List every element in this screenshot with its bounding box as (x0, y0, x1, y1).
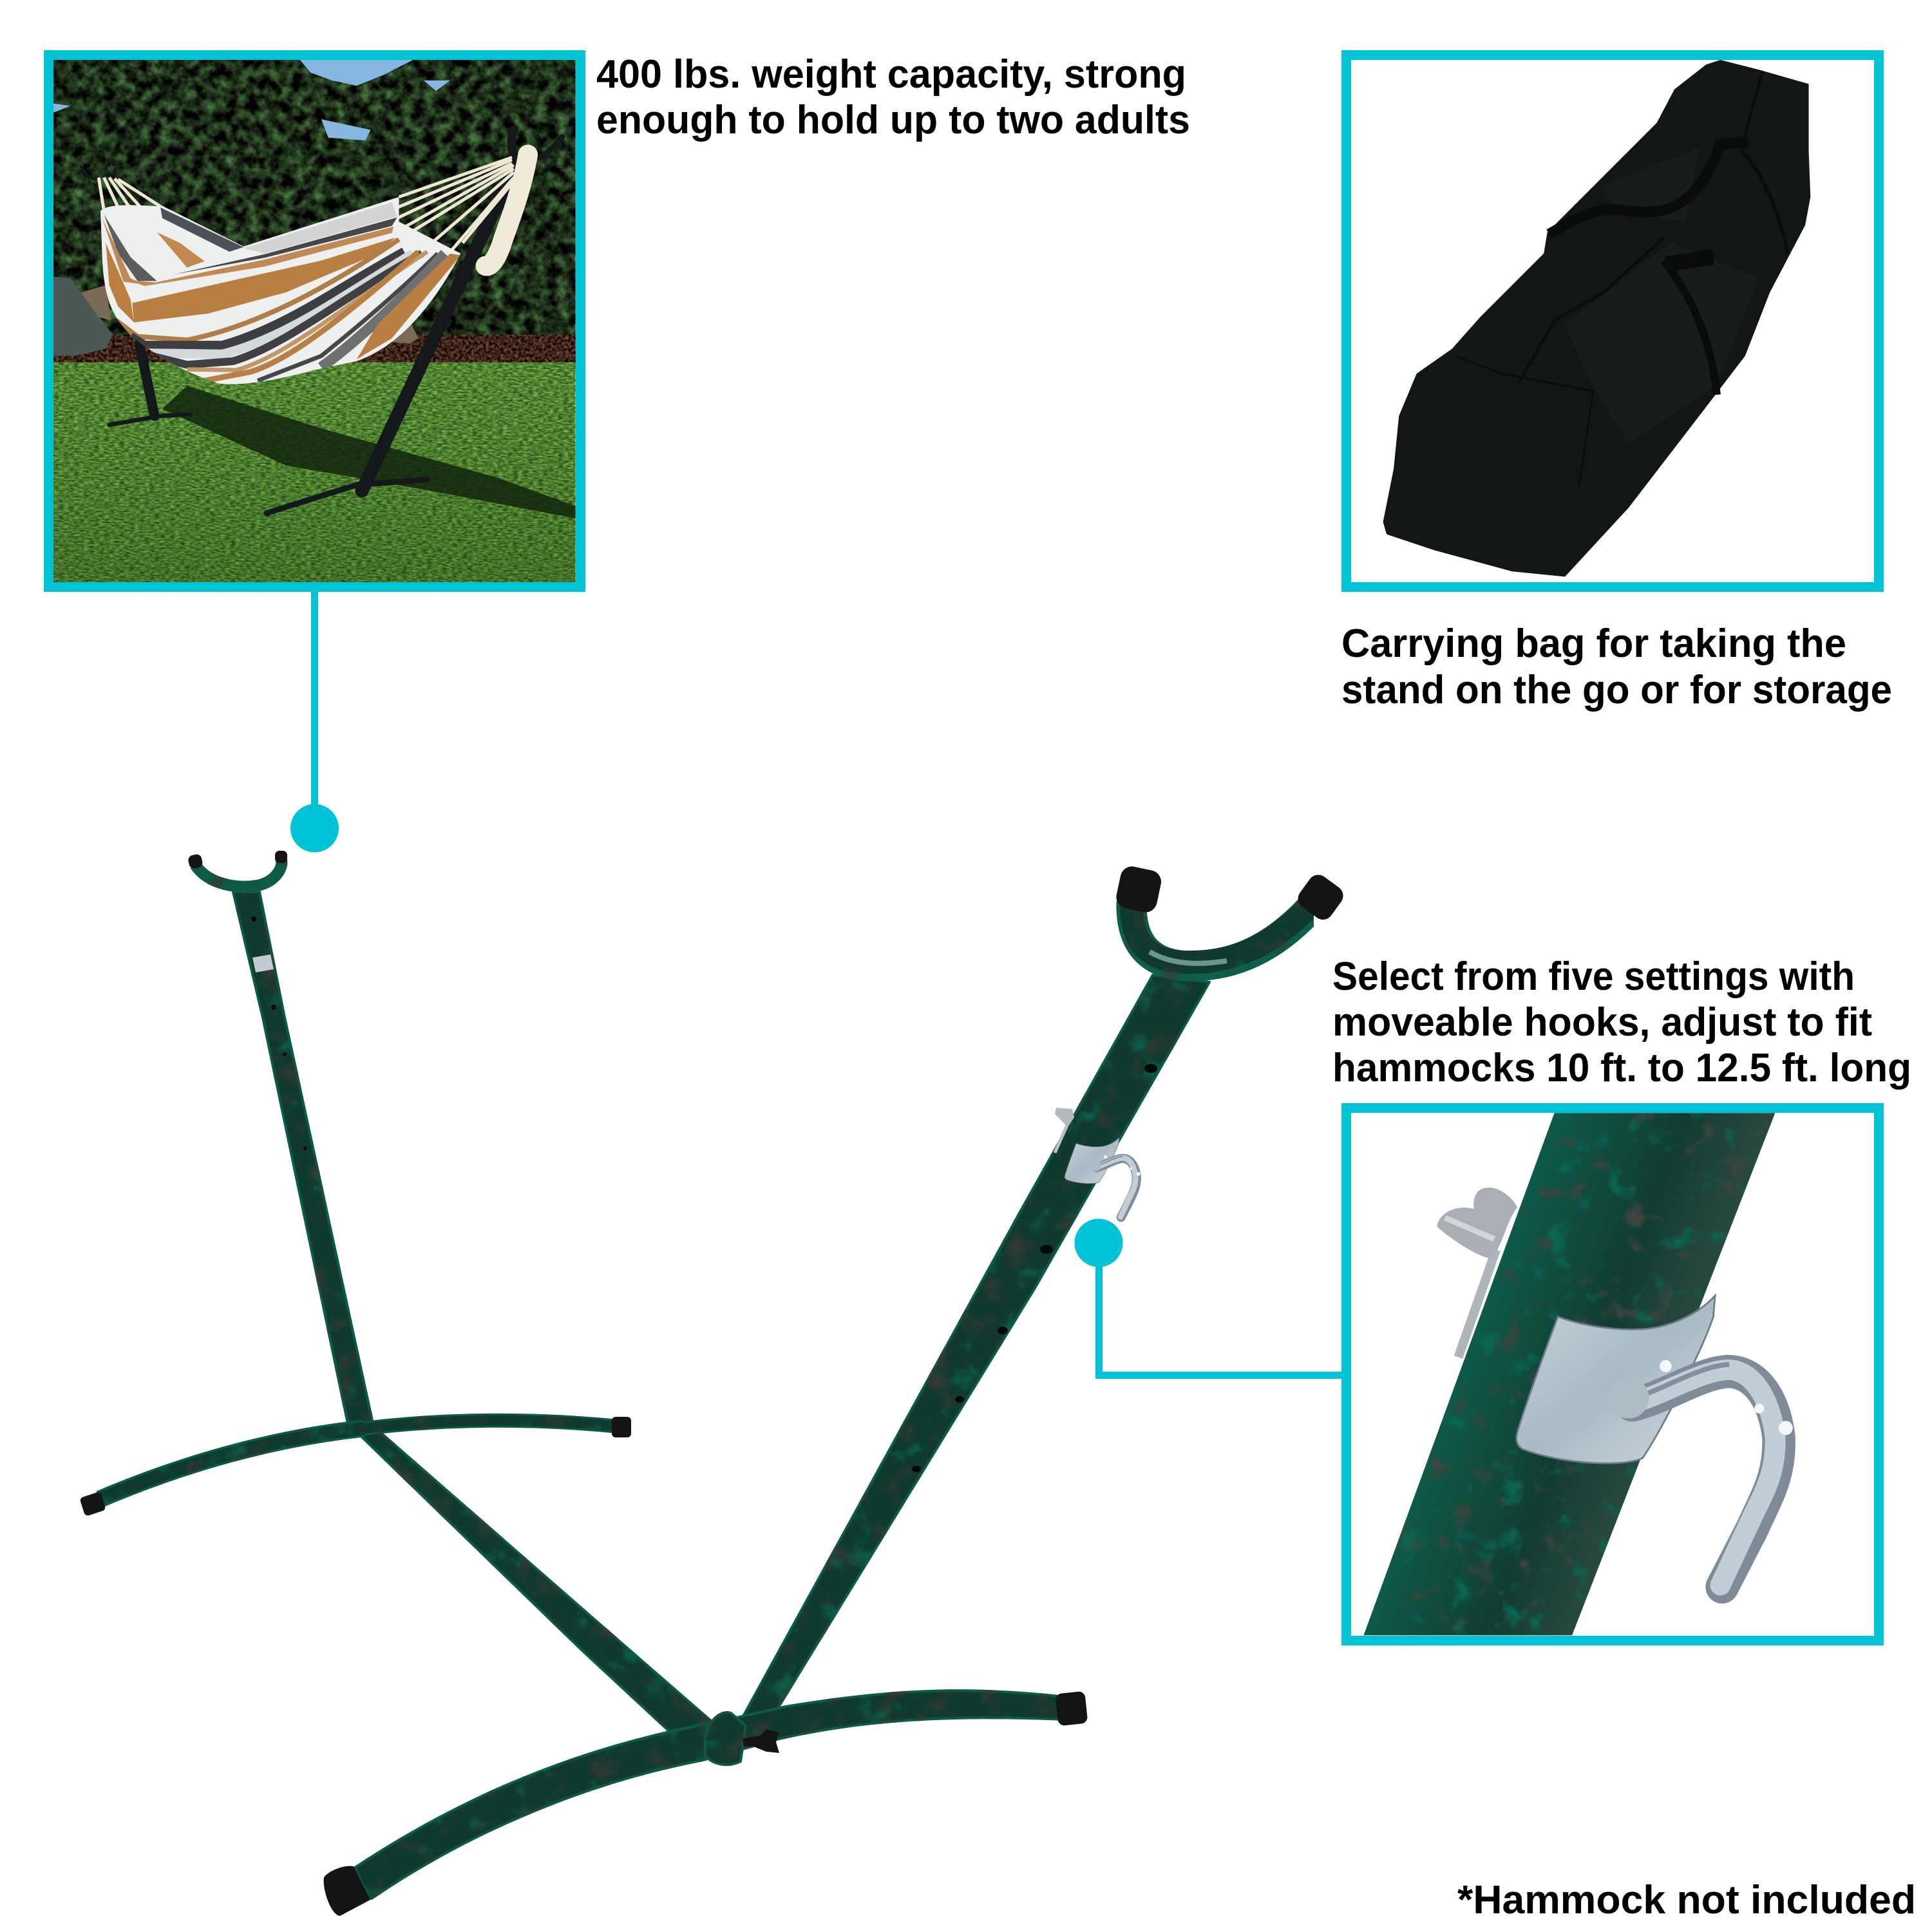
text: weight capacity: enough to hold up to two adults (596, 98, 1190, 142)
bag seams and straps (1455, 71, 1788, 487)
connector line: capacity photo to stand (290, 592, 339, 853)
connector line: hook close-up to stand (1074, 1218, 1346, 1376)
text: weight capacity: 400 lbs. weight capacity, strong (596, 52, 1186, 97)
sky (53, 60, 450, 140)
end caps (79, 851, 1347, 1916)
hook frame (1346, 1108, 1879, 1641)
stand tubes (97, 860, 1314, 1900)
stand in photo (81, 130, 562, 513)
clamp and hook (1517, 1296, 1793, 1587)
rope coil (486, 155, 528, 266)
text: hook settings: moveable hooks, adjust to fit (1332, 1000, 1872, 1045)
small clamp on left post (252, 954, 274, 972)
photo frame (49, 55, 581, 587)
shadow (162, 386, 576, 518)
wing nut and plate (1437, 1188, 1517, 1358)
text: carrying bag: stand on the go or for storage (1341, 668, 1892, 712)
text: carrying bag (1341, 621, 1892, 712)
hammock stand (79, 851, 1347, 1916)
photo panel: carrying bag (1346, 55, 1879, 587)
hammock fabric (91, 193, 466, 392)
adjustable hook on right post (1055, 1108, 1141, 1217)
adjustment holes (251, 916, 1157, 1472)
footnote: *Hammock not included (1457, 1878, 1916, 1922)
photo panel: hook close-up (1346, 1108, 1879, 1641)
mulch (53, 335, 576, 366)
text: hook settings: Select from five settings with (1332, 954, 1855, 999)
text: hook settings: hammocks 10 ft. to 12.5 ft. long (1332, 1046, 1911, 1090)
highlight on upper arm (1150, 952, 1227, 963)
green tube (1363, 1113, 1775, 1635)
bag body (1383, 60, 1810, 576)
rocks (53, 276, 113, 356)
photo panel: hammock on stand (49, 55, 581, 587)
text: carrying bag: Carrying bag for taking the (1341, 621, 1846, 666)
grass (53, 363, 576, 585)
text: weight capacity (596, 52, 1190, 142)
bag panels (1565, 147, 1759, 444)
ropes (99, 157, 514, 250)
trees (53, 60, 576, 364)
bag frame (1346, 55, 1879, 587)
fanned stripes (117, 240, 445, 381)
text: hook settings (1332, 954, 1911, 1090)
